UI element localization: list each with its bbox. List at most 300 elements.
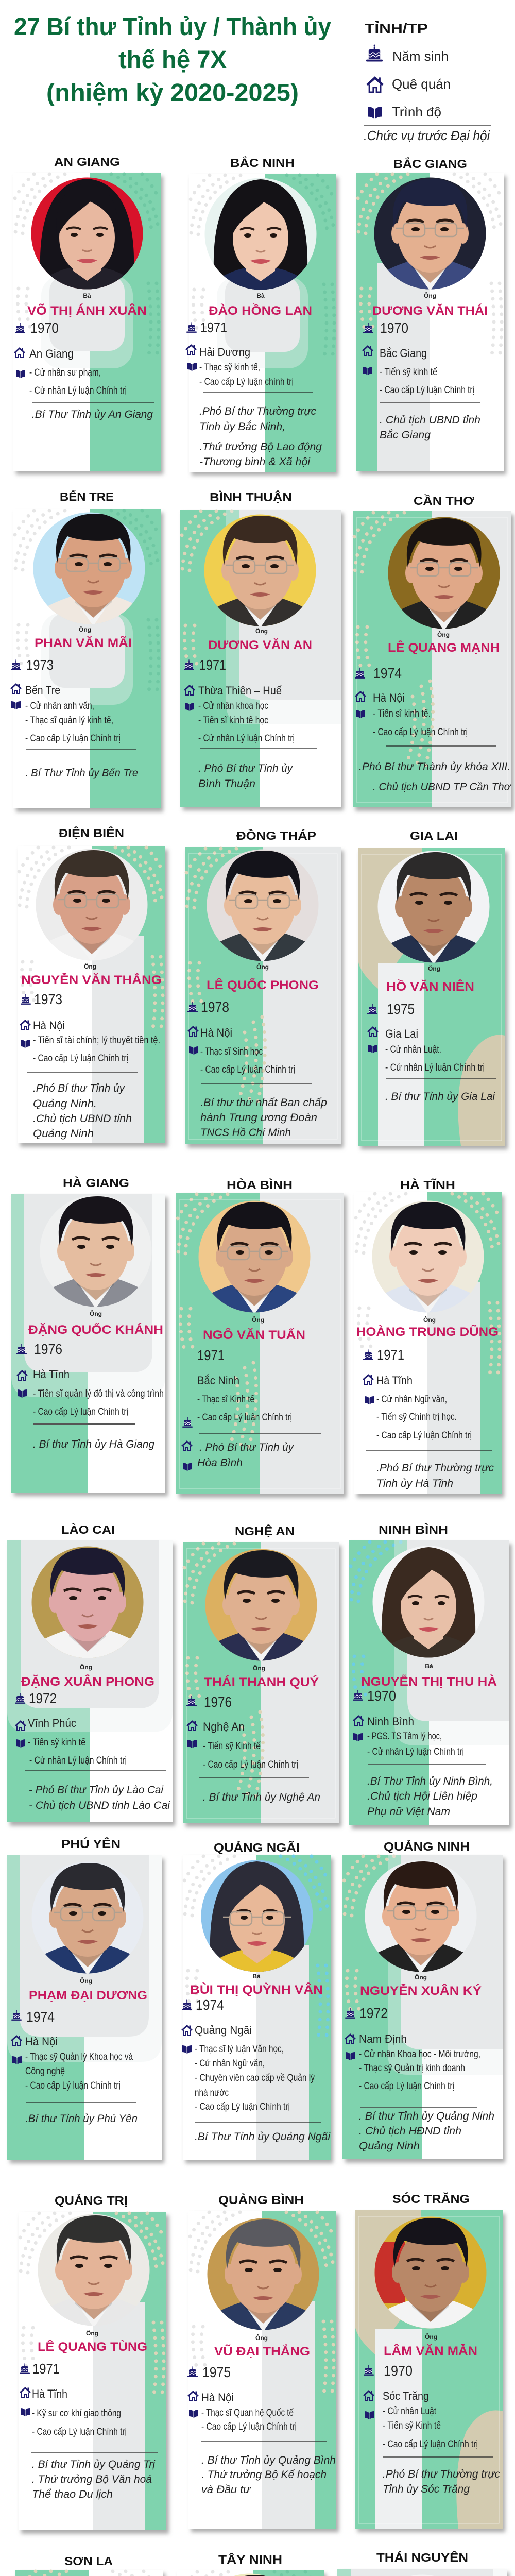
education: - Cao cấp Lý luận Chính trị [200, 1064, 295, 1075]
position: Quảng Ninh [33, 1128, 94, 1140]
hometown: Hà Nội [25, 2035, 58, 2048]
education: - Cao cấp Lý luận Chính trị [376, 1430, 472, 1441]
icon: house [15, 1720, 26, 1731]
icon: book [368, 107, 382, 119]
portrait [202, 514, 318, 628]
card background [7, 1540, 175, 1826]
position: . Thứ trưởng Bộ Văn hoá [32, 2473, 152, 2485]
birth year: 1975 [387, 1001, 415, 1017]
name: LÊ QUANG TÙNG [38, 2340, 147, 2354]
icon: cake [367, 1004, 377, 1014]
position: . Chủ tịch UBND tỉnh [380, 414, 480, 426]
card background [11, 1194, 168, 1496]
icon: book [368, 1045, 377, 1053]
position: .Bí Thư Tỉnh ủy An Giang [32, 409, 153, 420]
education: - Cao cấp Lý luận Chính trị [33, 1053, 128, 1064]
salutation: Bà [425, 1663, 433, 1670]
card background [349, 1540, 512, 1829]
salutation: Ông [428, 964, 440, 972]
salutation: Ông [84, 962, 96, 970]
province heading: BẮC NINH [230, 156, 295, 170]
icon: house [181, 2025, 193, 2035]
icon: cake [355, 668, 365, 679]
province heading: ĐIỆN BIÊN [59, 826, 124, 840]
salutation: Ông [86, 2329, 98, 2337]
icon: book [16, 1739, 25, 1748]
icon: house [363, 2390, 374, 2400]
icon: house [184, 685, 195, 695]
education: - Thạc sỹ kinh tế, [199, 362, 260, 373]
icon: cake [363, 323, 373, 333]
icon: cake [353, 1690, 363, 1701]
position: Quảng Ninh. [33, 1098, 97, 1110]
name: THÁI THANH QUÝ [204, 1675, 319, 1689]
panel: An Giang [13, 155, 163, 474]
portrait [372, 177, 488, 291]
portrait [363, 1860, 478, 1974]
salutation: Ông [256, 963, 269, 971]
icon: cake [15, 323, 25, 333]
icon: house [355, 691, 366, 701]
card background [188, 2211, 339, 2532]
birth year: 1978 [201, 999, 229, 1015]
position: TNCS Hồ Chí Minh [200, 1127, 291, 1139]
name: BÙI THỊ QUỲNH VÂN [190, 1982, 323, 1997]
province heading: GIA LAI [410, 829, 458, 842]
portrait [370, 1200, 486, 1314]
portrait [197, 1200, 312, 1314]
position: -Thương binh & Xã hội [199, 456, 311, 468]
icon: book [346, 2052, 355, 2060]
icon: book [21, 2408, 30, 2416]
position: . Bí thư Tỉnh ủy Quảng Trị [32, 2459, 156, 2470]
education [373, 708, 468, 738]
hometown: Bắc Giang [380, 347, 427, 360]
icon: book [182, 2045, 192, 2054]
position: .Phó Bí thư Thường trực [199, 405, 316, 417]
birth year: 1971 [199, 657, 226, 673]
icon: book [365, 1396, 374, 1404]
province heading: NINH BÌNH [379, 1522, 448, 1536]
icon: house [367, 1026, 379, 1037]
province heading: NGHỆ AN [235, 1524, 295, 1538]
name: NGUYỄN THỊ THU HÀ [361, 1674, 497, 1689]
panel: Nghệ An [183, 1524, 341, 1827]
position: .Bí Thư Tỉnh ủy Quảng Ngãi [195, 2131, 331, 2143]
position: - Phó Bí thư Tỉnh ủy Lào Cai [29, 1784, 164, 1796]
position: Tỉnh ủy Sóc Trăng [383, 2483, 470, 2495]
card background [355, 2210, 505, 2532]
position [198, 762, 293, 790]
education: - Cao cấp Lý luận Chính trị [380, 385, 474, 396]
panel: Sóc Trăng [355, 2192, 505, 2532]
province heading: BẮC GIANG [393, 157, 467, 171]
birth year: 1973 [34, 991, 62, 1007]
portrait [31, 177, 143, 291]
name: ĐẶNG QUỐC KHÁNH [28, 1323, 163, 1337]
portrait [36, 2214, 151, 2328]
portrait [194, 2573, 312, 2576]
education [359, 2049, 480, 2092]
education: - Cử nhân Ngữ văn, [195, 2058, 265, 2069]
hometown: Hà Nội [200, 1026, 232, 1039]
education: - Cao cấp Lý luận Chính trị [197, 1412, 292, 1423]
education [200, 1046, 295, 1075]
salutation: Bà [252, 1973, 261, 1980]
position: Bình Thuận [198, 778, 255, 790]
portrait [376, 851, 491, 964]
birth year: 1976 [204, 1694, 232, 1710]
card background [176, 1193, 347, 1498]
salutation: Ông [252, 1316, 264, 1324]
name: NGÔ VĂN TUẤN [203, 1328, 305, 1342]
panel: Quảng Ngãi [181, 1840, 333, 2163]
hometown: Hải Dương [199, 346, 250, 359]
hometown: An Giang [29, 347, 74, 360]
name: VŨ ĐẠI THẮNG [214, 2344, 310, 2359]
salutation: Ông [80, 1663, 92, 1671]
portrait [203, 1549, 319, 1663]
province heading: QUẢNG BÌNH [218, 2192, 304, 2207]
birth year: 1972 [359, 2005, 388, 2021]
education: - Cao cấp Lý luận Chính trị [359, 2081, 454, 2092]
portrait [201, 1860, 313, 1974]
icon: cake [366, 44, 383, 61]
panel: Hà Tĩnh [354, 1178, 504, 1498]
hometown: Vĩnh Phúc [28, 1717, 76, 1730]
province heading: TÂY NINH [218, 2552, 282, 2566]
position: . Phó Bí thư Tỉnh ủy [199, 1442, 294, 1453]
panel: Sơn La [15, 2554, 165, 2576]
card background [183, 1542, 341, 1827]
birth year: 1974 [373, 665, 402, 681]
name: HOÀNG TRUNG DŨNG [356, 1325, 499, 1339]
education [29, 367, 127, 396]
icon: book [363, 367, 372, 375]
education: nhà nước [195, 2088, 229, 2098]
icon: house [14, 347, 25, 358]
position: . Chủ tịch HĐND tỉnh [359, 2125, 461, 2137]
portrait [386, 517, 502, 631]
education [33, 1035, 160, 1064]
legend: birth year: Năm sinh [392, 48, 449, 64]
hometown: Sóc Trăng [383, 2389, 429, 2402]
position: .Bí thư Tỉnh ủy Phú Yên [25, 2113, 138, 2125]
salutation: Ông [424, 292, 436, 299]
birth year: 1971 [32, 2361, 60, 2377]
card background [356, 173, 506, 474]
province heading: SƠN LA [64, 2554, 113, 2568]
card background [7, 1855, 164, 2163]
panel: Phú Yên [7, 1837, 164, 2163]
position: . Bí thư Tỉnh ủy Nghệ An [203, 1791, 320, 1803]
province heading: PHÚ YÊN [61, 1837, 121, 1851]
card background [15, 2570, 165, 2576]
education: - Cao cấp Lý luận Chính trị [33, 1406, 128, 1417]
icon: book [18, 1389, 27, 1398]
icon: house [187, 2391, 199, 2401]
education: - Tiến sĩ kinh tế. [373, 708, 431, 719]
province heading: QUẢNG TRỊ [55, 2193, 128, 2207]
hometown: Hà Tĩnh [33, 1368, 70, 1381]
position [33, 1082, 132, 1140]
position: Thể thao Du lịch [32, 2488, 113, 2500]
icon: house [363, 1374, 374, 1384]
legend heading: TỈNH/TP [365, 21, 428, 36]
hometown: Hà Nội [201, 2391, 234, 2404]
education: - Thạc sĩ Quan hệ Quốc tế [201, 2408, 294, 2418]
position [376, 1462, 494, 1489]
icon: cake [16, 1344, 27, 1354]
education [380, 367, 474, 396]
education: - Cao cấp Lý luận Chính trị [195, 2102, 290, 2112]
portrait [205, 2218, 321, 2332]
icon: house [16, 1370, 28, 1380]
icon: cake [182, 1417, 193, 1428]
position: . Bí thư Tỉnh ủy Quảng Ninh [359, 2110, 494, 2122]
icon: house [11, 2035, 22, 2045]
card background [183, 1855, 333, 2163]
salutation: Ông [79, 625, 91, 633]
hometown: Thừa Thiên – Huế [198, 684, 282, 697]
position [359, 2110, 494, 2152]
name: LÊ QUANG MẠNH [388, 640, 500, 655]
position [32, 2459, 156, 2500]
icon: cake [186, 1696, 197, 1706]
name: NGUYỄN XUÂN KÝ [360, 1983, 482, 1998]
salutation: Bà [83, 292, 91, 299]
position: Bắc Giang [380, 429, 431, 441]
position: .Phó Bí thư Thường trực [376, 1462, 494, 1474]
education [198, 701, 295, 744]
icon: book [16, 370, 25, 378]
panel: Bình Thuận [180, 490, 344, 810]
panel: Quảng Bình [187, 2192, 339, 2532]
legend: hometown: Quê quán [392, 76, 451, 92]
education: - Thạc sỹ Quản trị kinh doanh [359, 2063, 465, 2074]
icon: house [20, 1020, 31, 1030]
education [385, 1044, 485, 1073]
position [200, 1097, 327, 1139]
province heading: HÀ TĨNH [400, 1178, 455, 1192]
position [367, 1775, 493, 1818]
province heading: BÌNH THUẬN [210, 490, 292, 504]
education [33, 1388, 164, 1417]
panel: Quảng Trị [19, 2193, 169, 2534]
icon: book [187, 1740, 197, 1748]
card background [13, 173, 163, 474]
position: .Phó Bí thư Thường trực [383, 2468, 500, 2480]
education: - Cao cấp Lý luận Chính trị [25, 2080, 121, 2091]
education [25, 2052, 133, 2091]
position: .Thứ trưởng Bộ Lao động [199, 441, 322, 453]
education: - Cử nhân Luật. [385, 1044, 441, 1055]
education [203, 1741, 298, 1770]
education: - Cử nhân khoa học [198, 701, 268, 711]
education: - Cao cấp Lý luận Chính trị [203, 1759, 298, 1770]
education: - Tiến sỹ Kinh tế [203, 1741, 261, 1752]
icon: cake [11, 659, 21, 670]
education: - Cử nhân Lý luận Chính trị [367, 1747, 464, 1757]
education: - Tiến sĩ kinh tế học [198, 715, 268, 726]
card background [337, 2569, 509, 2576]
icon: house [362, 345, 373, 355]
icon: house [366, 76, 384, 92]
education [32, 2408, 127, 2437]
education: - Cao cấp Lý luận chính trị [199, 377, 294, 387]
position [380, 414, 480, 441]
name: HỒ VĂN NIÊN [386, 979, 474, 994]
province heading: ĐỒNG THÁP [236, 828, 316, 842]
hometown: Ninh Bình [367, 1715, 414, 1728]
birth year: 1975 [202, 2364, 231, 2380]
position [29, 1784, 170, 1811]
card background [180, 510, 344, 810]
salutation: Ông [415, 1973, 427, 1981]
title [14, 13, 331, 107]
legend [364, 21, 491, 143]
panel: Điện Biên [18, 826, 168, 1147]
education [376, 1394, 472, 1441]
salutation: Ông [255, 2334, 268, 2342]
icon: book [189, 1046, 198, 1055]
birth year: 1973 [26, 657, 54, 673]
portrait [34, 849, 149, 962]
portrait [373, 2216, 488, 2330]
position [359, 761, 511, 793]
legend: education: Trình độ [392, 104, 441, 120]
education: - Tiến sỹ kinh tế [28, 1737, 85, 1748]
hometown: Hà Nội [373, 691, 405, 704]
hometown: Gia Lai [385, 1027, 418, 1040]
education: - Chuyên viên cao cấp về Quản lý [195, 2073, 315, 2083]
salutation: Ông [425, 2333, 437, 2341]
name: NGUYỄN VĂN THẮNG [21, 972, 162, 987]
education [28, 1737, 127, 1766]
legend: position: .Chức vụ trước Đại hội [364, 128, 490, 143]
icon: house [186, 1720, 198, 1731]
education [195, 2044, 315, 2112]
panel: Hòa Bình [176, 1178, 347, 1498]
education: - Thạc sĩ Kinh tế [197, 1394, 254, 1405]
education: - Cử nhân Lý luận Chính trị [29, 385, 127, 396]
card background [177, 2570, 327, 2576]
education: - Cử nhân Ngữ văn, [376, 1394, 447, 1405]
position: .Chủ tịch UBND tỉnh [33, 1113, 132, 1125]
portrait [372, 1546, 485, 1659]
education: - Tiến sỹ kinh tế [380, 367, 437, 378]
panel: Bắc Giang [356, 157, 506, 474]
name: PHAN VĂN MÃI [35, 636, 132, 650]
icon: cake [364, 2365, 374, 2376]
education: Công nghệ [25, 2066, 65, 2077]
hometown: Bến Tre [25, 684, 60, 697]
education: - Cử nhân anh văn, [25, 701, 94, 711]
birth year: 1971 [200, 319, 227, 335]
position: . Thứ trưởng Bộ Kế hoạch [201, 2469, 327, 2481]
panel: Gia Lai [358, 829, 508, 1149]
position: .Bí Thư Tỉnh ủy Ninh Bình, [367, 1775, 493, 1787]
position: . Bí thư Tỉnh ủy Hà Giang [33, 1438, 154, 1450]
card background [189, 174, 338, 476]
icon: cake [184, 659, 194, 670]
salutation: Ông [255, 627, 268, 635]
education [367, 1731, 464, 1757]
icon: house [187, 1026, 199, 1036]
position: và Đầu tư [201, 2484, 251, 2496]
icon: book [189, 2410, 198, 2418]
icon: cake [187, 1002, 198, 1012]
panel: Đồng Tháp [185, 828, 344, 1148]
hometown: Hà Nội [33, 1019, 65, 1032]
education: - Cử nhân Lý luận Chính trị [29, 1755, 127, 1766]
name: VÕ THỊ ÁNH XUÂN [27, 303, 147, 318]
icon: book [187, 363, 197, 371]
title: thế hệ 7X [118, 46, 227, 74]
hometown: Hà Tĩnh [376, 1374, 413, 1387]
province heading: QUẢNG NGÃI [214, 1840, 300, 1854]
card background [354, 1192, 504, 1498]
education: - Thạc sĩ Sinh học [200, 1046, 263, 1057]
hometown: Quảng Ngãi [195, 2024, 252, 2037]
icon: book [183, 1463, 192, 1471]
education: - Cử nhân Lý luận Chính trị [385, 1062, 485, 1073]
birth year: 1970 [30, 320, 59, 336]
hometown: Nghệ An [203, 1720, 245, 1733]
salutation: Ông [253, 1664, 265, 1672]
name: ĐẶNG XUÂN PHONG [21, 1674, 154, 1689]
province heading: CẦN THƠ [414, 494, 474, 507]
province heading: AN GIANG [54, 155, 120, 168]
position: Phụ nữ Việt Nam [367, 1806, 450, 1818]
birth year: 1971 [197, 1347, 225, 1363]
name: PHẠM ĐẠI DƯƠNG [29, 1989, 147, 2003]
panel: Thái Nguyên [337, 2550, 509, 2576]
education: - Cử nhân Luật [383, 2406, 437, 2417]
icon: house [10, 683, 22, 693]
education [199, 362, 294, 387]
hometown: Bắc Ninh [197, 1374, 239, 1387]
panel: Hà Giang [11, 1176, 168, 1496]
birth year: 1970 [367, 1688, 396, 1704]
icon: book [11, 701, 21, 709]
icon: house [345, 2033, 356, 2044]
education: - Tiến sỹ Chính trị học. [376, 1412, 457, 1422]
portrait [205, 849, 320, 963]
icon: cake [20, 2363, 30, 2374]
portrait [30, 1861, 145, 1975]
position [199, 405, 322, 468]
education: - Tiến sỹ Kinh tế [383, 2420, 441, 2431]
education: - Cao cấp Lý luận Chính trị [383, 2439, 478, 2450]
icon: book [185, 703, 194, 711]
position: .Bí thư thứ nhất Ban chấp [200, 1097, 327, 1109]
position: Tỉnh ủy Hà Tĩnh [376, 1478, 453, 1489]
education: - Tiến sĩ quản lý đô thị và công trình [33, 1388, 164, 1399]
education [383, 2406, 478, 2450]
province heading: THÁI NGUYÊN [376, 2550, 468, 2564]
icon: house [185, 344, 197, 354]
icon: book [356, 710, 365, 718]
portrait [33, 512, 151, 626]
title: 27 Bí thư Tỉnh ủy / Thành ủy [14, 13, 331, 41]
province heading: BẾN TRE [60, 489, 114, 503]
education: - Thạc sĩ lý luận Văn học, [195, 2044, 284, 2055]
card background [18, 846, 168, 1147]
position: . Chủ tịch UBND TP Cần Thơ [373, 781, 511, 793]
icon: cake [182, 1999, 192, 2010]
province heading: QUẢNG NINH [384, 1839, 470, 1853]
